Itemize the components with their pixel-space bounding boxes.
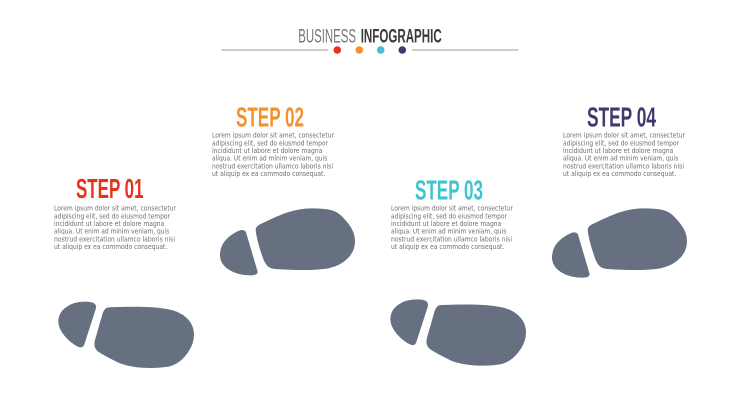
step 1 text: aliqua. Ut enim ad minim veniam, quis: [54, 228, 170, 236]
step 1 text: adipiscing elit, sed do eiusmod tempor: [54, 212, 170, 220]
step 4 text: ut aliquip ex ea commodo consequat.: [563, 170, 676, 178]
step 2 text: incididunt ut labore et dolore magna: [212, 147, 322, 155]
step 2 text: adipiscing elit, sed do eiusmod tempor: [212, 139, 328, 147]
step 3 text: Lorem ipsum dolor sit amet, consectetur: [391, 205, 513, 213]
step 4 text: Lorem ipsum dolor sit amet, consectetur: [563, 132, 685, 140]
step 2 text: nostrud exercitation ullamco laboris nisi: [212, 162, 333, 170]
title divider with dots: [222, 46, 518, 54]
step 2 text: aliqua. Ut enim ad minim veniam, quis: [212, 155, 328, 163]
title: INFOGRAPHIC: [361, 26, 442, 48]
step 4 heading: STEP 04: [587, 102, 656, 132]
step 1 text: Lorem ipsum dolor sit amet, consectetur: [54, 205, 176, 213]
step 4 text: aliqua. Ut enim ad minim veniam, quis: [563, 155, 679, 163]
step 4 text: [563, 132, 685, 178]
step 4 text: incididunt ut labore et dolore magna: [563, 147, 673, 155]
step 4 text: adipiscing elit, sed do eiusmod tempor: [563, 139, 679, 147]
step 2 text: Lorem ipsum dolor sit amet, consectetur: [212, 132, 334, 140]
step 1 text: [54, 205, 176, 251]
step 1 text: ut aliquip ex ea commodo consequat.: [54, 243, 167, 251]
step 1 text: nostrud exercitation ullamco laboris nisi: [54, 236, 175, 244]
step 3 text: adipiscing elit, sed do eiusmod tempor: [391, 212, 507, 220]
icon: footprint step 1: [59, 302, 194, 368]
icon: footprint step 2: [220, 209, 355, 275]
step 3 text: [391, 205, 513, 251]
step 2 text: ut aliquip ex ea commodo consequat.: [212, 170, 325, 178]
step 1 text: incididunt ut labore et dolore magna: [54, 220, 164, 228]
step 4 text: nostrud exercitation ullamco laboris nisi: [563, 162, 684, 170]
step 2 text: [212, 132, 334, 178]
title: BUSINESS: [298, 26, 356, 48]
step 2 heading: STEP 02: [236, 101, 304, 132]
step 3 text: incididunt ut labore et dolore magna: [391, 220, 501, 228]
step 3 text: nostrud exercitation ullamco laboris nisi: [391, 236, 512, 244]
step 3 text: ut aliquip ex ea commodo consequat.: [391, 243, 504, 251]
title: [298, 26, 442, 48]
step 1 heading: STEP 01: [76, 173, 144, 204]
icon: footprint step 3: [391, 300, 526, 365]
step 3 text: aliqua. Ut enim ad minim veniam, quis: [391, 228, 507, 236]
icon: footprint step 4: [552, 209, 687, 277]
step 3 heading: STEP 03: [415, 175, 483, 206]
